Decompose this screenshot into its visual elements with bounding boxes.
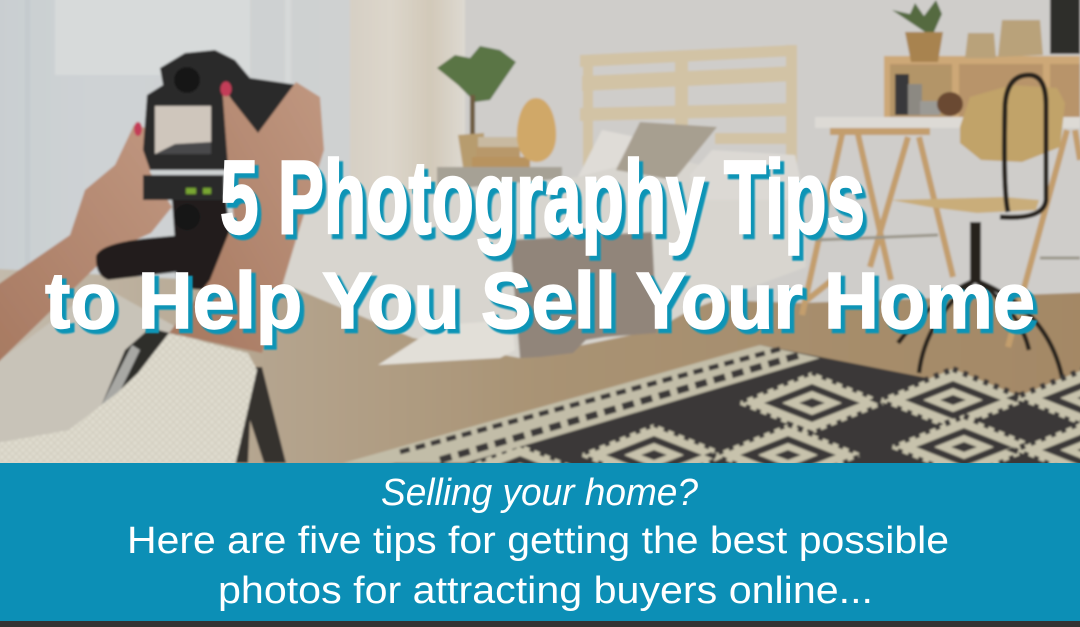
desk with trestle legs xyxy=(802,117,1080,347)
duvet top xyxy=(690,150,805,200)
knit sleeve xyxy=(0,333,257,470)
camera screen xyxy=(155,106,211,154)
banner text line 1: Selling your home? xyxy=(381,472,699,514)
hands holding camera on tripod xyxy=(0,50,324,470)
banner text line 3: photos for attracting buyers online... xyxy=(218,570,873,612)
grey knit pillow xyxy=(616,122,717,180)
floor xyxy=(0,268,1080,480)
tripod head and handle xyxy=(96,175,225,285)
floor lighter left xyxy=(0,285,200,480)
white pillow xyxy=(578,130,636,177)
wall xyxy=(0,0,1080,340)
plant, books, vase and side table xyxy=(437,46,562,207)
throw blanket xyxy=(510,232,657,358)
tripod column behind hand xyxy=(172,198,236,292)
rug border band xyxy=(343,345,820,463)
nails xyxy=(220,82,232,96)
shelf crates and baskets xyxy=(884,0,1080,117)
title line 2: to Help You Sell Your Home xyxy=(45,256,1035,345)
bed with pillows and throw xyxy=(282,122,806,365)
window with sheer curtain xyxy=(0,0,350,300)
intro banner xyxy=(0,463,1080,621)
chair xyxy=(891,75,1065,382)
right hand and forearm xyxy=(169,82,324,353)
tripod legs xyxy=(234,367,286,463)
title xyxy=(45,140,1039,349)
left arm and hand xyxy=(0,125,172,380)
title shadows xyxy=(49,145,1039,349)
title shadows: to Help You Sell Your Home xyxy=(49,260,1039,349)
camera body xyxy=(143,50,298,170)
banner text line 2: Here are five tips for getting the best possible xyxy=(127,520,949,562)
viewfinder xyxy=(174,67,200,93)
bottom dark strip xyxy=(0,621,1080,627)
front pillow xyxy=(378,320,515,365)
beige curtain xyxy=(350,0,465,220)
geometric rug xyxy=(343,345,1080,506)
banner background xyxy=(0,463,1080,621)
pallet headboard xyxy=(580,45,797,180)
